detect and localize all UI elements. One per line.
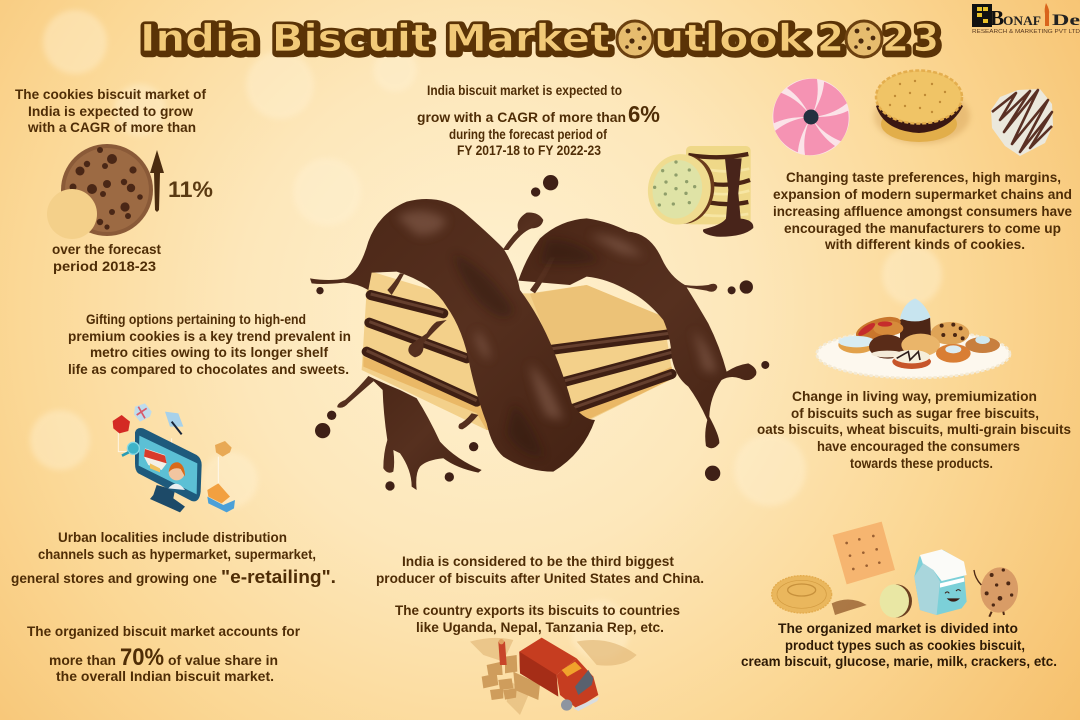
logo: B xyxy=(990,6,1004,30)
text: organized market share: The organized biscuit market accounts for xyxy=(27,624,301,639)
title: 2 xyxy=(884,19,910,62)
text: taste preferences: with different kinds of cookies. xyxy=(824,237,1025,252)
text: product types: product types such as cookies biscuit, xyxy=(785,638,1025,653)
chocolate ribbons xyxy=(310,199,756,490)
text: gifting options: Gifting options pertaining to high-end xyxy=(86,312,306,327)
text: urban channels: general stores and growing one xyxy=(11,571,217,586)
text: third biggest producer: producer of biscuits after United States and China. xyxy=(376,571,704,586)
text: third biggest producer xyxy=(376,554,704,586)
title: 2 xyxy=(817,17,844,60)
text: forecast period: period 2018-23 xyxy=(53,259,157,274)
icon: e-commerce monitor xyxy=(113,403,235,512)
logo: RESEARCH & MARKETING PVT LTD xyxy=(972,29,1080,35)
chocolate highlights xyxy=(397,211,717,420)
logo xyxy=(972,3,1080,35)
text: living way: oats biscuits, wheat biscuits, multi-grain biscuits xyxy=(757,422,1071,437)
icon: cookie plate xyxy=(817,298,1010,378)
text: exports: The country exports its biscuits to countries xyxy=(395,603,680,618)
icon: sandwich biscuit xyxy=(874,70,970,144)
text: living way: have encouraged the consumers xyxy=(817,439,1020,454)
round biscuit xyxy=(772,576,867,615)
logo: ONAF xyxy=(1003,13,1041,28)
logo: De xyxy=(1052,12,1080,29)
text: taste preferences: increasing affluence amongst consumers have xyxy=(773,204,1072,219)
green biscuit xyxy=(880,584,912,618)
text: exports: like Uganda, Nepal, Tanzania Rep, etc. xyxy=(416,620,664,635)
text: organized market share: of value share in xyxy=(168,653,278,668)
text: gifting options: metro cities owing to its longer shelf xyxy=(90,345,329,360)
title: utlook xyxy=(654,17,808,60)
title: 3 xyxy=(913,17,939,60)
text: taste preferences xyxy=(773,170,1072,252)
text: organized market share: 70% xyxy=(120,644,164,671)
chocolate droplets xyxy=(315,175,769,491)
text: India biscuit CAGR: 6% xyxy=(628,101,660,127)
stat: 11%: 11% xyxy=(168,177,213,202)
icon: pink swirl cookie xyxy=(766,77,856,157)
text: living way: of biscuits such as sugar free biscuits, xyxy=(791,406,1039,421)
text: taste preferences: encouraged the manufacturers to come up xyxy=(784,221,1061,236)
text: product types xyxy=(741,621,1057,669)
title: 2 xyxy=(882,17,909,60)
text: living way: towards these products. xyxy=(850,456,993,471)
text: India biscuit CAGR: during the forecast period of xyxy=(449,127,607,142)
text: urban channels: Urban localities include distribution xyxy=(58,530,287,545)
icon: growth arrow xyxy=(150,150,164,212)
text: third biggest producer: India is considered to be the third biggest xyxy=(402,554,675,569)
text: living way: Change in living way, premiumization xyxy=(792,389,1037,404)
title: India Biscuit Market xyxy=(140,17,610,60)
text: urban channels: "e-retailing". xyxy=(221,567,336,587)
icon: cookie letter O xyxy=(617,21,653,57)
title: 2 xyxy=(818,19,846,62)
wafer xyxy=(362,272,673,430)
text: taste preferences: Changing taste preferences, high margins, xyxy=(786,170,1061,185)
title: 3 xyxy=(914,19,940,62)
text: taste preferences: expansion of modern supermarket chains and xyxy=(773,187,1072,202)
text: India biscuit CAGR: India biscuit market is expected to xyxy=(427,83,622,98)
cracker xyxy=(833,522,895,584)
text: exports xyxy=(395,603,680,635)
text: gifting options: premium cookies is a key trend prevalent in xyxy=(68,329,351,344)
text: organized market share: more than xyxy=(49,653,116,668)
text: product types: cream biscuit, glucose, marie, milk, crackers, etc. xyxy=(741,654,1057,669)
text: organized market share: the overall Indian biscuit market. xyxy=(56,669,274,684)
text: gifting options xyxy=(68,312,351,377)
text: cookies CAGR xyxy=(15,87,206,135)
text: product types: The organized market is divided into xyxy=(778,621,1018,636)
text: India biscuit CAGR: grow with a CAGR of more than xyxy=(417,110,626,125)
title xyxy=(140,17,940,62)
title: India Biscuit Market xyxy=(142,19,612,62)
text: urban channels: channels such as hypermarket, supermarket, xyxy=(38,547,316,562)
milk carton xyxy=(914,549,967,615)
icon: drizzled white cookie xyxy=(991,89,1053,156)
text: cookies CAGR: with a CAGR of more than xyxy=(27,120,196,135)
icon: delivery truck with map xyxy=(470,638,637,715)
text: cookies CAGR: The cookies biscuit market of xyxy=(15,87,206,102)
text: living way xyxy=(757,389,1071,471)
icon: stacked cream biscuits xyxy=(642,146,753,237)
icon: cracker, biscuits, milk and cookie characters xyxy=(772,522,1020,618)
text: organized market share xyxy=(27,624,301,684)
cookie character xyxy=(974,566,1020,617)
icon: cookie digit 0 xyxy=(846,21,882,57)
text: forecast period: over the forecast xyxy=(52,242,161,257)
text: urban channels xyxy=(11,530,336,587)
text: India biscuit CAGR: FY 2017-18 to FY 2022-23 xyxy=(457,143,601,158)
text: cookies CAGR: India is expected to grow xyxy=(28,104,193,119)
title: utlook xyxy=(656,19,809,62)
text: gifting options: life as compared to chocolates and sweets. xyxy=(68,362,349,377)
illustration: chocolate-splashed wafer xyxy=(310,175,769,491)
text: forecast period xyxy=(52,242,161,274)
text: India biscuit CAGR xyxy=(417,83,660,158)
icon: chocolate chip cookie xyxy=(47,144,153,239)
